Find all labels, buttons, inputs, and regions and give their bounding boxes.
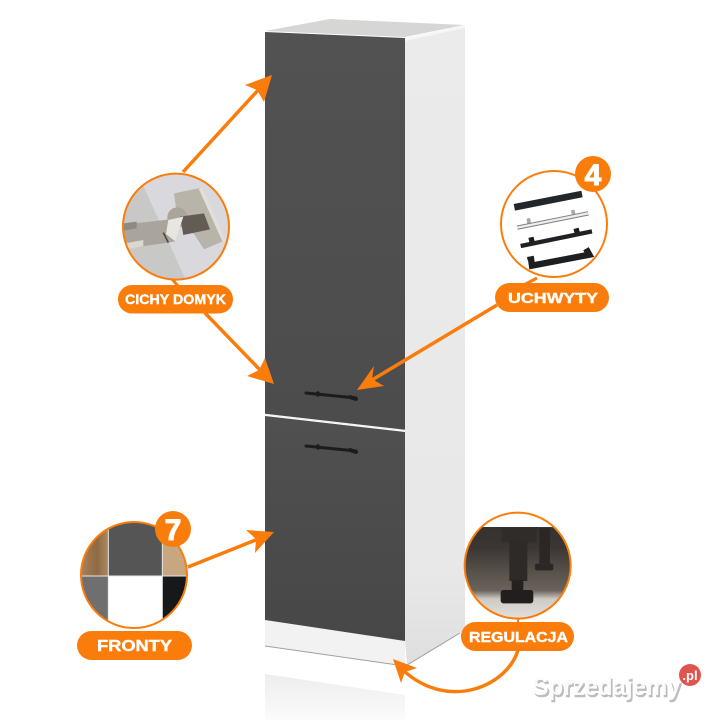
watermark: Sprzedajemy.pl <box>532 664 701 703</box>
watermark: Sprzedajemy.pl: Sprzedajemy <box>534 675 682 703</box>
label: FRONTY: FRONTY <box>97 638 173 655</box>
upper door <box>265 32 405 430</box>
arrow: hinge to lower edge of upper door <box>205 313 274 384</box>
watermark: Sprzedajemy.pl: .pl <box>682 668 698 683</box>
arrow: fronts <box>188 530 274 567</box>
badge: 4 <box>575 156 611 192</box>
icon: handles circle <box>501 171 607 277</box>
badge: 4: 4 <box>585 159 602 192</box>
cabinet <box>265 19 465 720</box>
lower door handle <box>306 446 356 452</box>
label: FRONTY <box>77 631 192 660</box>
icon: fronts swatch circle <box>80 522 189 629</box>
label: CICHY DOMYK <box>118 285 233 314</box>
label: REGULACJA <box>461 622 574 651</box>
upper door handle <box>306 393 356 399</box>
cabinet side panel <box>405 26 465 665</box>
badge: 7 <box>155 511 191 547</box>
arrow: hinge to upper door <box>183 75 272 172</box>
connector: hinge circle to label <box>172 279 178 286</box>
icon: adjustable foot circle <box>463 512 573 620</box>
connector: handles circle to label <box>520 278 537 287</box>
lower door <box>265 416 405 641</box>
badge: 7: 7 <box>165 514 181 547</box>
floor reflection <box>265 674 405 720</box>
arrow: adjustment curved <box>393 650 518 692</box>
label: UCHWYTY <box>495 283 609 312</box>
label: CICHY DOMYK: CICHY DOMYK <box>125 291 226 307</box>
label: UCHWYTY: UCHWYTY <box>508 290 598 307</box>
cabinet plinth <box>265 620 405 666</box>
arrow: handles <box>357 305 497 390</box>
connector: foot circle to label <box>517 619 519 623</box>
icon: hinge circle <box>120 170 233 283</box>
cabinet top face <box>265 19 464 37</box>
label: REGULACJA: REGULACJA <box>469 630 569 646</box>
watermark: Sprzedajemy.pl: Sprzedajemy <box>532 673 681 701</box>
